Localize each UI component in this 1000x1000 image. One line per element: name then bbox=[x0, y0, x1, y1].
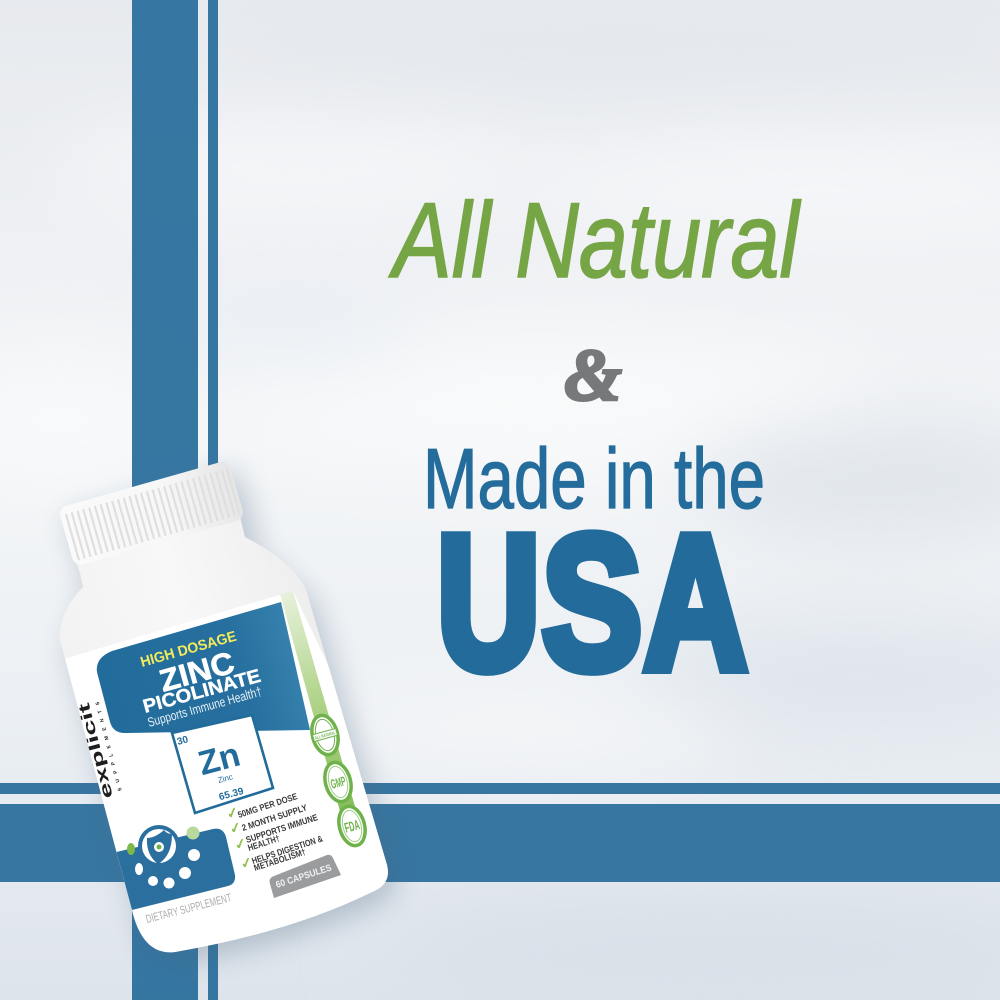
periodic table element box: Zinc bbox=[217, 772, 234, 785]
feature checklist: ✓ bbox=[228, 818, 243, 837]
feature checklist: METABOLISM† bbox=[253, 847, 307, 873]
feature checklist: ✓ bbox=[239, 853, 254, 872]
bottle shadow bbox=[66, 470, 396, 962]
vertical blue stripes bbox=[132, 0, 218, 1000]
periodic table element box: 30 bbox=[176, 734, 190, 748]
capsule count badge bbox=[270, 855, 341, 898]
dietary supplement caption: DIETARY SUPPLEMENT bbox=[145, 892, 233, 926]
blue shield panel bbox=[116, 825, 236, 910]
title text bbox=[139, 629, 263, 730]
certification badges bbox=[308, 712, 369, 849]
bottle cap bbox=[58, 460, 245, 567]
horizontal blue stripes bbox=[0, 783, 1000, 882]
title text: PICOLINATE bbox=[141, 666, 263, 718]
heading: USA: U bbox=[437, 497, 540, 709]
brand name bbox=[79, 702, 122, 798]
feature checklist bbox=[225, 791, 324, 873]
supplement bottle bbox=[60, 462, 388, 952]
feature checklist: ✓ bbox=[225, 803, 240, 822]
bottle body bbox=[60, 500, 388, 952]
periodic table element box bbox=[172, 715, 273, 813]
green side bar bbox=[280, 591, 356, 815]
heading: USA: S bbox=[542, 497, 642, 709]
badge: all natural: ALL NATURAL bbox=[314, 730, 336, 740]
badge: FDA: FDA bbox=[343, 816, 361, 836]
feature checklist: ✓ bbox=[233, 834, 248, 853]
ampersand: & bbox=[564, 335, 622, 417]
badge: GMP: GMP bbox=[329, 773, 347, 792]
product label bbox=[65, 591, 388, 952]
heading: USA bbox=[437, 497, 747, 709]
feature checklist: 50MG PER DOSE bbox=[237, 791, 299, 820]
feature checklist: 2 MONTH SUPPLY bbox=[241, 802, 308, 833]
blue title panel bbox=[97, 602, 310, 733]
brand name: explicit bbox=[76, 700, 117, 800]
heading: USA: A bbox=[644, 497, 747, 709]
periodic table element box: Zn bbox=[194, 736, 244, 783]
feature checklist: HELPS DIGESTION & bbox=[251, 833, 324, 866]
title text: Supports Immune Health† bbox=[146, 684, 263, 730]
capsule count badge: 60 CAPSULES bbox=[275, 862, 333, 891]
feature checklist: SUPPORTS IMMUNE bbox=[245, 812, 319, 845]
title text: HIGH DOSAGE bbox=[139, 629, 239, 671]
heading: All Natural: All Natural bbox=[388, 180, 802, 300]
title text: ZINC bbox=[156, 645, 238, 699]
periodic table element box: 65.39 bbox=[218, 786, 245, 803]
brand name: SUPPLEMENTS bbox=[95, 700, 124, 792]
feature checklist: HEALTH† bbox=[247, 833, 281, 853]
heading: Made in the: Made in the bbox=[423, 432, 765, 527]
